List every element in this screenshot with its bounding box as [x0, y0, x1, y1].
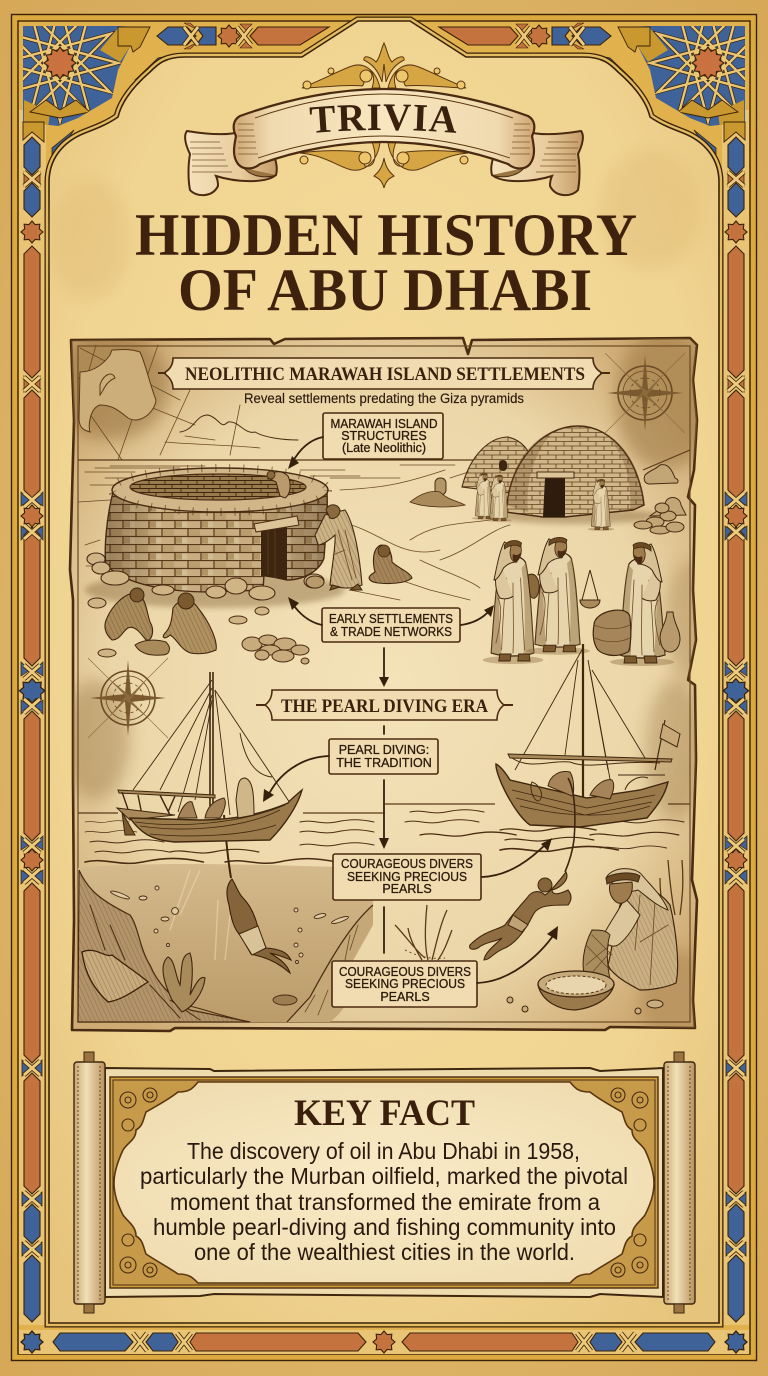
- banner: Neolithic Marawah Island Settlements: [158, 358, 610, 389]
- coral: [163, 953, 205, 1012]
- label: Courageous Divers, second: PEARLS: [380, 990, 430, 1004]
- scroll rod right: [664, 1052, 695, 1313]
- label: Pearl Diving: The Tradition: PEARL DIVING:: [339, 743, 429, 757]
- connector under banner: [383, 726, 385, 734]
- parchment map panel: [50, 330, 720, 1050]
- ribbon tails: [185, 131, 583, 195]
- scroll rod left: [74, 1052, 105, 1313]
- key fact body: particularly the Murban oilfield, marked the pivotal: [140, 1163, 628, 1189]
- label: Early Settlements & Trade Networks: & TRADE NETWORKS: [330, 625, 452, 639]
- ribbon text: TRIVIA: [310, 104, 456, 133]
- left dhow boat: [117, 672, 302, 842]
- left rocks: [78, 870, 250, 1022]
- arrow: to settlements: [288, 597, 322, 625]
- cream cartouche: [114, 1082, 654, 1283]
- doorway: [254, 516, 299, 580]
- base stones: [87, 553, 324, 600]
- ornament below ribbon: [300, 142, 468, 188]
- bottom center star: [373, 1331, 395, 1353]
- border side right: [722, 110, 749, 1325]
- goods: scale, jar and barrel: [528, 570, 680, 655]
- kneeling pearl sorter: [583, 869, 678, 990]
- arrow: down to pearl era: [379, 648, 389, 687]
- ribbon text: TRIVIA: TRIVIA: [310, 104, 456, 133]
- border top left: [157, 23, 329, 49]
- key fact body: moment that transformed the emirate from a: [170, 1189, 600, 1215]
- seated figure: [369, 545, 412, 583]
- bowl of pearls: [507, 971, 663, 1014]
- title: OF ABU DHABI: [178, 257, 592, 323]
- key fact body: humble pearl-diving and fishing community into: [153, 1214, 616, 1240]
- label: Early Settlements & Trade Networks: [322, 608, 460, 642]
- label: Courageous Divers, second: SEEKING PRECIOUS: [345, 977, 465, 991]
- stone pile: [242, 635, 309, 664]
- diver descending: [224, 815, 291, 973]
- right dhow boat: [496, 644, 680, 827]
- key fact body: [140, 1138, 628, 1265]
- label: Marawah Island Structures: MARAWAH ISLAND: [330, 417, 438, 431]
- arrow: to merchants: [461, 605, 494, 625]
- connector between labels: [383, 907, 385, 953]
- map sketch: coastline: [78, 345, 298, 460]
- key fact body: one of the wealthiest cities in the world.: [194, 1239, 575, 1265]
- corner rosette left: [2, 5, 172, 165]
- label: Courageous Divers, second: COURAGEOUS DIVERS: [339, 965, 471, 979]
- subtitle: Reveal settlements predating the Giza pyramids: [244, 391, 524, 406]
- label: Courageous Divers, first: PEARLS: [382, 882, 432, 896]
- large dome hut: [493, 426, 657, 524]
- key fact scroll: [74, 1052, 695, 1313]
- compass rose left: [88, 658, 168, 738]
- label: Marawah Island Structures: [323, 413, 443, 459]
- arrow: down to divers: [379, 780, 389, 849]
- compass rose top right: [605, 353, 685, 433]
- rock piles near huts: [634, 465, 686, 534]
- corner rosette right: [596, 5, 766, 165]
- horizon and shoreline: [78, 450, 690, 600]
- bubbles and fish: [110, 886, 349, 1005]
- arrow: to diver: [477, 926, 558, 983]
- scroll sheet: [105, 1068, 663, 1297]
- label: Early Settlements & Trade Networks: EARLY SETTLEMENTS: [329, 612, 453, 626]
- small dome hut: [410, 437, 535, 507]
- title: [135, 202, 637, 323]
- label: Courageous Divers, first: [333, 854, 481, 900]
- banner: The Pearl Diving Era: THE PEARL DIVING ERA: [281, 696, 488, 717]
- banner: Neolithic Marawah Island Settlements: NEOLITHIC MARAWAH ISLAND SETTLEMENTS: [185, 364, 585, 385]
- label: Courageous Divers, first: SEEKING PRECIOUS: [347, 870, 467, 884]
- workers at structure: [267, 471, 362, 590]
- circular stone structure: [85, 468, 345, 608]
- border side left: [19, 110, 46, 1325]
- arrow: to left boat: [263, 756, 329, 802]
- ornament above ribbon: [302, 43, 466, 89]
- ribbon band: [234, 89, 534, 168]
- banner: The Pearl Diving Era: [256, 690, 513, 720]
- arrow: to right boat: [482, 838, 552, 877]
- right seabed: [287, 905, 373, 1022]
- label: Pearl Diving: The Tradition: THE TRADITION: [336, 756, 432, 770]
- corner flourishes: [120, 1088, 648, 1277]
- border bottom right: [402, 1331, 747, 1353]
- hut figures: [472, 473, 614, 531]
- label: Pearl Diving: The Tradition: [329, 739, 438, 774]
- kneeling figures: [88, 588, 269, 657]
- underwater scene: [78, 815, 373, 1022]
- label: Courageous Divers, first: COURAGEOUS DIVERS: [341, 857, 473, 871]
- heading: Key Fact: KEY FACT: [294, 1093, 475, 1134]
- arrow: to structure: [288, 437, 323, 469]
- border bottom left: [19, 1330, 749, 1354]
- sea surface: [78, 804, 690, 863]
- second rope and swimming diver: [470, 778, 575, 960]
- border top right: [439, 23, 611, 49]
- title: HIDDEN HISTORY: [135, 202, 637, 268]
- key fact body: The discovery of oil in Abu Dhabi in 1958,: [187, 1138, 580, 1164]
- label: Courageous Divers, second: [332, 961, 477, 1007]
- label: Marawah Island Structures: (Late Neolithic): [342, 441, 426, 455]
- reeds: [395, 860, 683, 960]
- merchants trading: [483, 537, 680, 666]
- label: Marawah Island Structures: STRUCTURES: [341, 429, 427, 443]
